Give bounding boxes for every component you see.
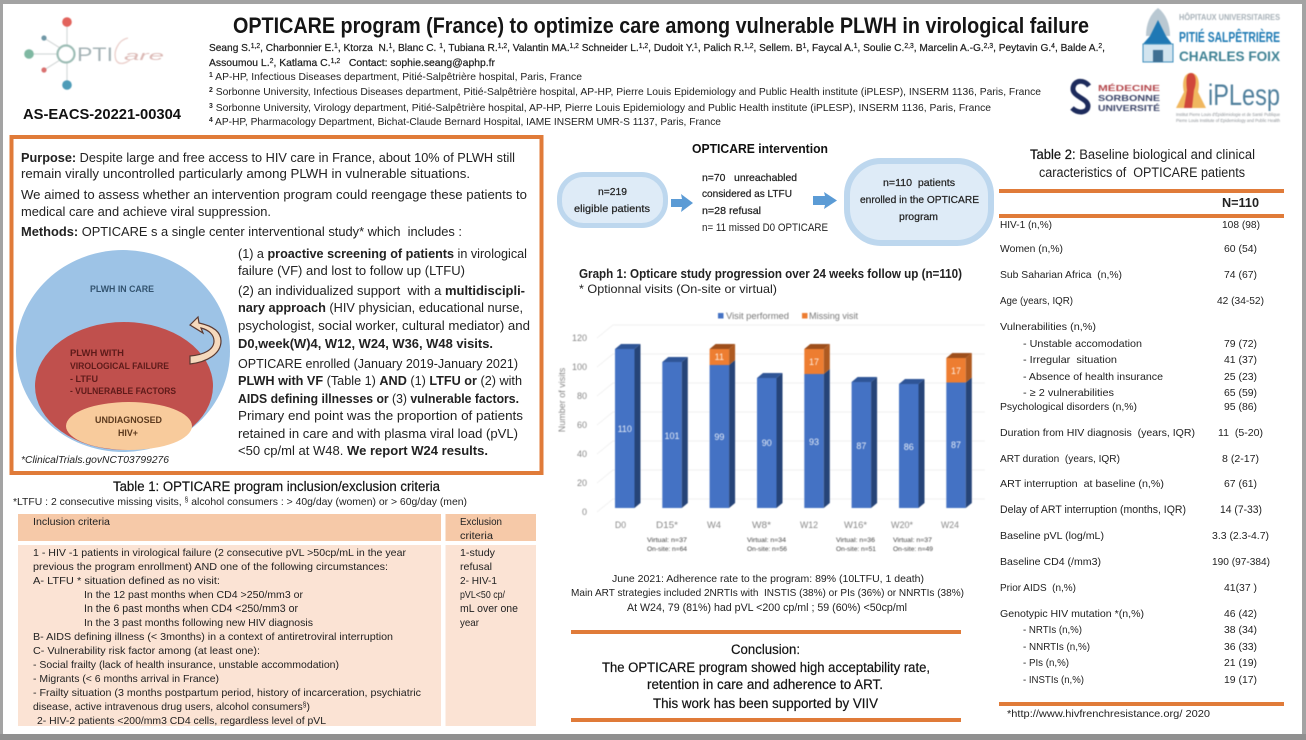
inclusion criteria column: Inclusion criteria (33, 517, 110, 528)
table 2 footnote: *http://www.hivfrenchresistance.org/ 2020 (1007, 708, 1210, 720)
methods text (21, 224, 530, 458)
methods text: <50 cp/ml at W48. We report W24 results. (238, 443, 488, 458)
excluded patients (702, 172, 828, 234)
bar: W12: 93 (809, 437, 819, 447)
bar: W4: 99 (714, 432, 724, 442)
title: OPTICARE program (France) to optimize care among vulnerable PLWH in virological failure (233, 13, 1089, 38)
excluded patients: n=28 refusal (702, 205, 761, 217)
exclusion criteria column: criteria (460, 530, 493, 542)
abstract number: AS-EACS-20221-00304 (23, 106, 182, 123)
bar: W20 (899, 379, 924, 508)
logo: iPLesp (1176, 73, 1280, 123)
chart legend: Visit performed (726, 311, 789, 321)
inclusion criteria column (33, 517, 421, 727)
logo: iPLesp: Pierre Louis Institute of Epidemiology and Public Health (1176, 118, 1280, 123)
inclusion criteria column: A- LTFU * situation defined as no visit: (33, 575, 220, 587)
exclusion criteria column: 2- HIV-1 (460, 575, 497, 587)
panel: table 1 (13, 479, 536, 727)
inclusion criteria column: - Social frailty (lack of health insurance, unstable accommodation) (33, 659, 339, 671)
bar: W24: 17 (951, 366, 961, 376)
bar: D15: 101 (665, 431, 680, 441)
purpose text: remain virally uncontrolled particularly among PLWH in vulnerable situations. (21, 166, 470, 181)
visit mode annotations: On-site: n=49 (893, 547, 934, 553)
x axis labels: W8* (752, 520, 772, 530)
y axis: 60 (577, 420, 587, 430)
authors and affiliations: 4 AP-HP, Pharmacology Department, Bichat-Claude Bernard Hospital, IAME INSERM UMR-S 1137, Paris, France (209, 116, 721, 128)
table 2 labels: - Absence of health insurance (1023, 371, 1163, 383)
inclusion criteria column: In the 6 past months when CD4 <250/mm3 or (84, 603, 298, 615)
x axis labels (615, 520, 959, 530)
excluded patients: n= 11 missed D0 OPTICARE (702, 222, 828, 234)
x axis labels: W12 (800, 520, 818, 530)
methods text: psychologist, social worker, cultural mediator) and (238, 318, 530, 333)
methods text: failure (VF) and lost to follow up (LTFU) (238, 263, 465, 278)
diagram: PLWH care cascade: UNDIAGNOSED (95, 415, 162, 425)
x axis labels: W24 (941, 520, 959, 530)
table 2 values: 60 (54) (1224, 243, 1257, 255)
authors and affiliations: Assoumou L.2, Katlama C.1,2 Contact: sophie.seang@aphp.fr (209, 57, 495, 69)
authors and affiliations (209, 42, 1105, 128)
table 2 labels: Sub Saharian Africa (n,%) (1000, 269, 1122, 281)
bar: D0: 110 (618, 424, 632, 434)
table 2 values (1212, 219, 1270, 686)
methods text: D0,week(W)4, W12, W24, W36, W48 visits. (238, 336, 493, 351)
purpose text: medical care and achieve viral suppression. (21, 204, 271, 219)
table 2 values: 67 (61) (1224, 478, 1257, 490)
table 2 labels: Genotypic HIV mutation *(n,%) (1000, 608, 1144, 620)
y axis: Number of visits (557, 367, 567, 432)
visit mode annotations (647, 538, 934, 553)
diagram: PLWH care cascade: - VULNERABLE FACTORS (70, 386, 176, 396)
x axis labels: D15* (656, 520, 679, 530)
diagram: PLWH care cascade: PLWH IN CARE (90, 284, 154, 294)
methods text: Methods: OPTICARE s a single center interventional study* which includes : (21, 224, 462, 239)
purpose text: We aimed to assess whether an intervention program could reengage these patients to (21, 187, 527, 202)
table 1 footnote: *LTFU : 2 consecutive missing visits, § alcohol consumers : > 40g/day (women) or > 60g/day (men) (13, 496, 467, 508)
bar: W8: 90 (762, 438, 772, 448)
x axis labels: W20* (891, 520, 913, 530)
table 2 values: 8 (2-17) (1222, 453, 1259, 465)
inclusion criteria column: 1 - HIV -1 patients in virological failure (2 consecutive pVL >50cp/mL in the year (33, 547, 406, 559)
table 2 labels: Women (n,%) (1000, 243, 1063, 255)
enrolled patients box: enrolled in the OPTICARE (860, 194, 979, 206)
logo: iPLesp: Institut Pierre Louis d'Épidémiologie et de Santé Publique (1176, 111, 1280, 117)
exclusion criteria column: 1-study (460, 547, 496, 559)
intervention heading: OPTICARE intervention (692, 141, 828, 156)
authors and affiliations: 3 Sorbonne University, Virology department, Pitié-Salpêtrière hospital, AP-HP, Pierre Louis Epidemiology and Public Health institute (iPLESP), INSERM 1136, Paris, France (209, 102, 991, 114)
table 2 values: 11 (5-20) (1218, 427, 1263, 439)
logo: Pitié Salpêtrière Charles Foix: HÔPITAUX UNIVERSITAIRES (1179, 13, 1281, 22)
panel: purpose and methods (12, 137, 542, 473)
y axis (557, 333, 587, 517)
diagram: PLWH care cascade (16, 250, 230, 452)
inclusion criteria column: 2- HIV-2 patients <200/mm3 CD4 cells, regardless level of pVL (37, 715, 326, 727)
table 2 labels: Baseline pVL (log/mL) (1000, 530, 1104, 542)
arrow: eligible to exclusions (671, 194, 693, 212)
diagram: PLWH care cascade: PLWH WITH (70, 348, 124, 358)
table 2 values: 74 (67) (1224, 269, 1257, 281)
bar: W12: 17 (809, 357, 819, 367)
y axis: 120 (572, 333, 587, 343)
inclusion criteria column: disease, active intravenous drug users, alcohol consumers§) (33, 701, 310, 713)
exclusion criteria column: Exclusion (460, 516, 502, 528)
logo: OPTICARE: PTI (77, 45, 113, 66)
table 2 labels: ART interruption at baseline (n,%) (1000, 478, 1164, 490)
graph subtitle: * Optionnal visits (On-site or virtual) (579, 282, 777, 296)
table 2 labels: - NNRTIs (n,%) (1023, 641, 1090, 653)
header (23, 8, 1281, 128)
table 2 values: 41 (37) (1224, 354, 1257, 366)
y axis: 100 (572, 362, 587, 372)
conclusion (602, 642, 930, 711)
enrolled patients box: n=110 patients (883, 177, 955, 189)
inclusion criteria column: - Frailty situation (3 months postpartum period, history of incarceration, psychiatric (33, 687, 421, 699)
x axis labels: W4 (707, 520, 721, 530)
table 1 heading: Table 1: OPTICARE program inclusion/exclusion criteria (113, 479, 440, 494)
methods text: nary approach (HIV physician, educational nurse, (238, 300, 523, 315)
inclusion criteria column: previous the program enrollment) AND one of the following circumstances: (33, 561, 388, 573)
column header: N=110 (1222, 196, 1259, 210)
exclusion criteria column (460, 516, 518, 629)
bar: W8 (757, 373, 782, 508)
enrolled patients box (847, 161, 991, 243)
purpose text (21, 150, 527, 219)
table 2 labels: - INSTIs (n,%) (1023, 674, 1084, 686)
visit mode annotations: On-site: n=64 (647, 547, 688, 553)
table 2 labels: ART duration (years, IQR) (1000, 453, 1120, 465)
table 2 values: 108 (98) (1222, 219, 1260, 231)
panel: OPTICARE intervention flow (560, 141, 991, 243)
bar: W24: 87 (951, 440, 961, 450)
logo: OPTICARE: are (124, 48, 164, 63)
table 2 labels: - NRTIs (n,%) (1023, 624, 1082, 636)
y axis: 80 (577, 391, 587, 401)
excluded patients: n=70 unreachabled (702, 172, 797, 184)
icon: curved return arrow (190, 317, 221, 364)
methods text: AIDS defining illnesses or (3) vulnerable factors. (238, 391, 519, 406)
logo: Médecine Sorbonne Université: MÉDECINE (1098, 83, 1160, 93)
results text: At W24, 79 (81%) had pVL <200 cp/ml ; 59 (60%) <50cp/ml (627, 602, 907, 614)
graph heading: Graph 1: Opticare study progression over 24 weeks follow up (n=110) (579, 267, 962, 281)
stacked bar chart (557, 311, 985, 553)
table 2 labels: HIV-1 (n,%) (1000, 219, 1052, 231)
bar: W20: 86 (904, 442, 914, 452)
results text (571, 573, 964, 614)
logo: Médecine Sorbonne Université: SORBONNE (1098, 93, 1160, 103)
logo: Pitié Salpêtrière Charles Foix (1143, 8, 1281, 64)
inclusion criteria column: B- AIDS defining illness (< 3months) in a context of antiretroviral interruption (33, 631, 393, 643)
logo: OPTICARE (24, 17, 164, 90)
results text: Main ART strategies included 2NRTIs with INSTIS (38%) or PIs (36%) or NNRTIs (38%) (571, 587, 964, 599)
visit mode annotations: Virtual: n=37 (647, 538, 688, 544)
panel: graph 1 (557, 267, 985, 553)
bar: D15 (662, 357, 688, 508)
conclusion: Conclusion: (731, 642, 800, 657)
methods text: (2) an individualized support with a multidiscipli- (238, 283, 525, 298)
diagram: PLWH care cascade: VIROLOGICAL FAILURE (70, 361, 169, 371)
table 2 labels: Delay of ART interruption (months, IQR) (1000, 504, 1186, 516)
table 2 heading: caracteristics of OPTICARE patients (1039, 165, 1245, 180)
bar: W4 (710, 344, 735, 508)
arrow: exclusions to enrolled (813, 192, 837, 209)
visit mode annotations: Virtual: n=34 (747, 538, 787, 544)
table 2 labels: - Unstable accomodation (1023, 338, 1142, 350)
authors and affiliations: 2 Sorbonne University, Infectious Diseases department, Pitié-Salpêtrière hospital, AP-HP, Pierre Louis Epidemiology and Public Health institute (iPLESP), INSERM 1136, Paris, France (209, 86, 1041, 98)
inclusion criteria column: In the 12 past months when CD4 >250/mm3 or (84, 589, 303, 601)
table 2 values: 190 (97-384) (1212, 556, 1270, 568)
bar: W4: 11 (715, 352, 724, 362)
logo: iPLesp: iPLesp (1208, 79, 1280, 112)
table 2 labels: Baseline CD4 (/mm3) (1000, 556, 1101, 568)
eligible patients box (560, 174, 666, 226)
methods text: OPTICARE enrolled (January 2019-January 2021) (238, 356, 518, 371)
methods text: PLWH with VF (Table 1) AND (1) LTFU or (2) with (238, 373, 522, 388)
authors and affiliations: Seang S.1,2, Charbonnier E.1, Ktorza N.1, Blanc C. 1, Tubiana R.1,2, Valantin MA.1,2 Schneider L.1,2, Dudoit Y.1, Palich R.1,2, Sellem. B1, Faycal A.1, Soulie C.2,3, Marcelin A.-G.2,3, Peytavin G.4, Balde A.2, (209, 42, 1105, 54)
inclusion criteria column: - Migrants (< 6 months arrival in France) (33, 673, 219, 685)
inclusion criteria column: In the 3 past months following new HIV diagnosis (84, 617, 313, 629)
visit mode annotations: On-site: n=56 (747, 547, 788, 553)
eligible patients box: n=219 (598, 186, 627, 198)
panel: table 2 (999, 147, 1284, 720)
logo: Pitié Salpêtrière Charles Foix: CHARLES FOIX (1179, 48, 1281, 64)
methods text: Primary end point was the proportion of patients (238, 408, 524, 423)
inclusion criteria column: C- Vulnerability risk factor among (at least one): (33, 645, 260, 657)
bar: D0 (615, 344, 640, 508)
table 2 values: 79 (72) (1224, 338, 1257, 350)
table 2 labels: - Irregular situation (1023, 354, 1117, 366)
x axis labels: D0 (615, 520, 626, 530)
footnote: trial registration: *ClinicalTrials.govNCT03799276 (21, 455, 169, 466)
table 2 values: 95 (86) (1224, 401, 1257, 413)
conclusion: The OPTICARE program showed high acceptability rate, (602, 660, 930, 675)
conclusion: retention in care and adherence to ART. (647, 677, 883, 692)
table 2 values: 38 (34) (1224, 624, 1257, 636)
table 2 values: 3.3 (2.3-4.7) (1212, 530, 1269, 542)
visit mode annotations: Virtual: n=37 (893, 538, 933, 544)
y axis: 20 (577, 478, 587, 488)
table 2 labels: Psychological disorders (n,%) (1000, 401, 1137, 413)
table 2 values: 25 (23) (1224, 371, 1257, 383)
authors and affiliations: 1 AP-HP, Infectious Diseases department, Pitié-Salpêtrière hospital, Paris, France (209, 71, 582, 83)
y axis: 0 (582, 507, 587, 517)
table 2 values: 36 (33) (1224, 641, 1257, 653)
results text: June 2021: Adherence rate to the program: 89% (10LTFU, 1 death) (612, 573, 924, 585)
table 2 values: 41(37 ) (1224, 582, 1257, 594)
table 2 heading: Table 2: Baseline biological and clinical (1030, 147, 1255, 162)
exclusion criteria column: pVL<50 cp/ (460, 589, 505, 601)
table 2 labels: Vulnerabilities (n,%) (1000, 321, 1096, 333)
eligible patients box: eligible patients (574, 203, 650, 215)
bar: W24 (946, 353, 972, 508)
chart legend (718, 311, 858, 321)
table 2 values: 42 (34-52) (1217, 295, 1264, 307)
methods text: (1) a proactive screening of patients in virological (238, 246, 527, 261)
exclusion criteria column: mL over one (460, 603, 518, 615)
enrolled patients box: program (899, 211, 938, 223)
visit mode annotations: On-site: n=51 (836, 547, 877, 553)
table 2 labels (1000, 219, 1195, 686)
chart legend: Missing visit (809, 311, 858, 321)
excluded patients: considered as LTFU (702, 188, 792, 200)
table 2 labels: Duration from HIV diagnosis (years, IQR) (1000, 427, 1195, 439)
exclusion criteria column: refusal (460, 561, 492, 573)
conclusion: This work has been supported by VIIV (653, 696, 878, 711)
table 2 values: 21 (19) (1224, 657, 1257, 669)
table 2 labels: - ≥ 2 vulnerabilities (1023, 387, 1114, 399)
diagram: PLWH care cascade: - LTFU (70, 374, 98, 384)
diagram: PLWH care cascade: HIV+ (118, 428, 138, 438)
bar: W16 (852, 377, 877, 508)
table 2 labels: - PIs (n,%) (1023, 657, 1069, 669)
visit mode annotations: Virtual: n=36 (836, 538, 876, 544)
logo: Médecine Sorbonne Université (1072, 81, 1160, 113)
y axis: 40 (577, 449, 587, 459)
purpose text: Purpose: Despite large and free access to HIV care in France, about 10% of PLWH still (21, 150, 515, 165)
methods text: retained in care and with plasma viral load (pVL) (238, 426, 518, 441)
table 2 heading (1030, 147, 1255, 180)
table 2 values: 65 (59) (1224, 387, 1257, 399)
x axis labels: W16* (844, 520, 868, 530)
table 2 labels: Prior AIDS (n,%) (1000, 582, 1076, 594)
table 2 values: 46 (42) (1224, 608, 1257, 620)
bar: W16: 87 (856, 441, 866, 451)
exclusion criteria column: year (460, 617, 479, 629)
logo: Médecine Sorbonne Université: UNIVERSITÉ (1098, 103, 1160, 113)
table 2 values: 14 (7-33) (1220, 504, 1262, 516)
table 2 labels: Age (years, IQR) (1000, 295, 1073, 307)
bar: W12 (804, 344, 830, 508)
table 2 values: 19 (17) (1224, 674, 1257, 686)
